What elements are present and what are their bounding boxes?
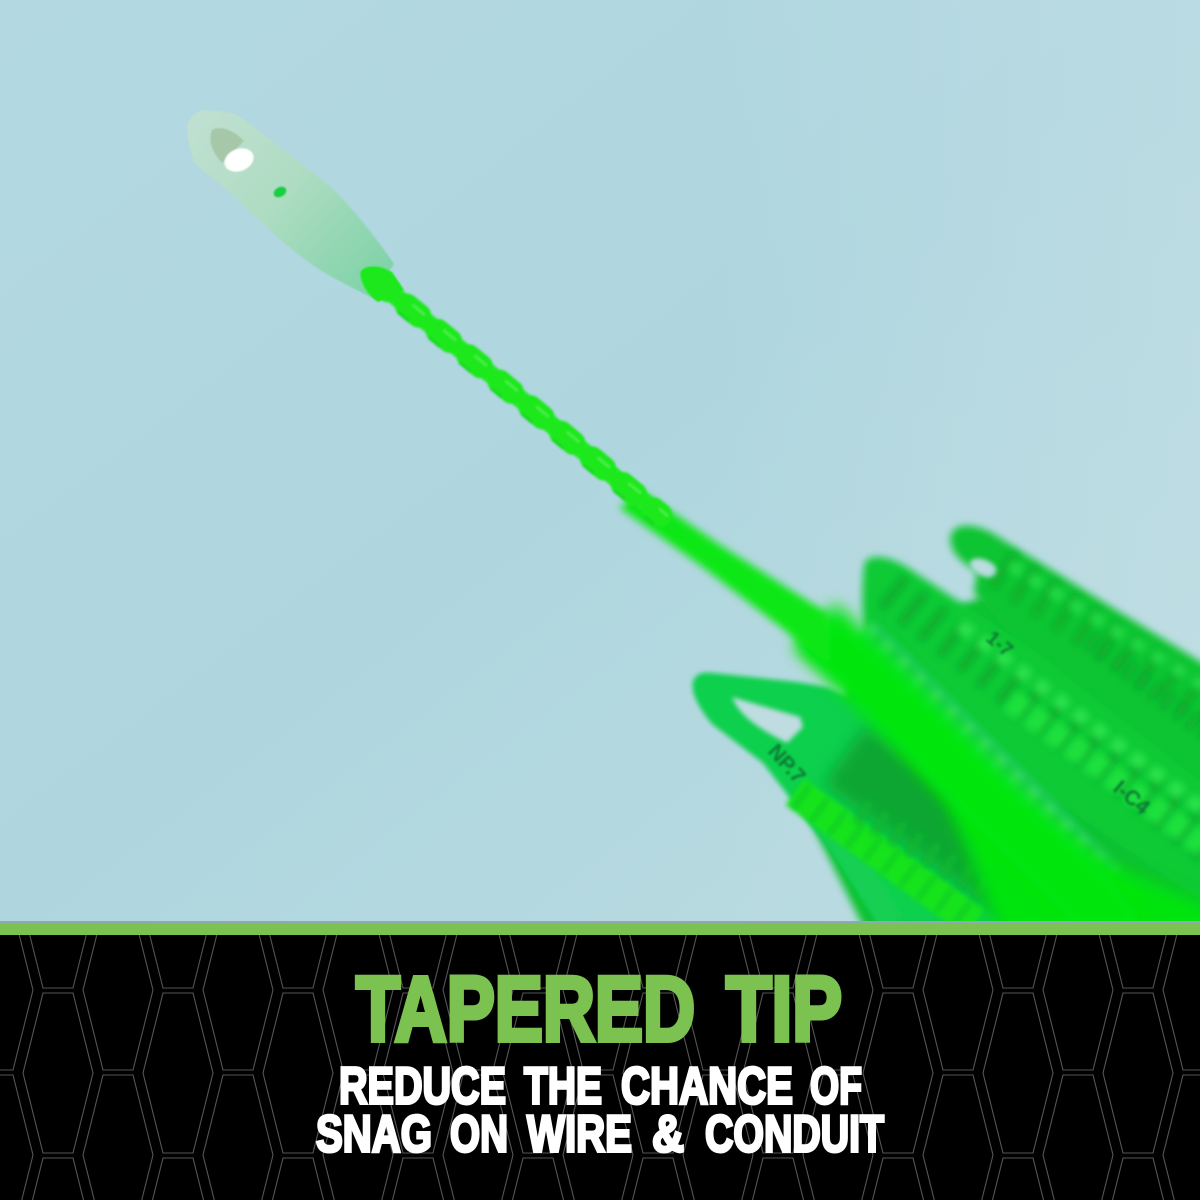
subtitle line 1: THE <box>524 1056 602 1114</box>
subtitle line 1: OF <box>810 1056 862 1114</box>
strand: lower-left loop <box>689 669 995 921</box>
subtitle line 1: CHANCE <box>621 1056 793 1114</box>
subtitle line 2: ON <box>450 1104 508 1162</box>
green divider bar <box>0 923 1200 935</box>
subtitle line 2: & <box>652 1104 684 1162</box>
subtitle <box>316 1056 884 1162</box>
marking text on strands: 1-7 <box>982 628 1016 661</box>
strand: far right loop <box>944 520 1200 735</box>
subtitle line 1: REDUCE <box>339 1056 506 1114</box>
strand: pale middle twist <box>862 632 1110 880</box>
photo: green fish tape bundle <box>693 526 1200 960</box>
marking text on strands: NP.7 <box>763 740 810 788</box>
cord: blurred central strand <box>786 632 1200 921</box>
bar shadow <box>0 921 1200 923</box>
subtitle line 2: WIRE <box>527 1104 632 1162</box>
photo background <box>0 0 1200 923</box>
strand: middle loop <box>862 557 1200 920</box>
subtitle line 1 <box>339 1056 862 1114</box>
title: TIP <box>726 958 842 1060</box>
subtitle line 2: SNAG <box>316 1104 432 1162</box>
subtitle line 2 <box>316 1104 884 1162</box>
bundle base <box>803 594 1200 921</box>
hexagon pattern <box>0 935 1200 1200</box>
black text band <box>0 935 1200 1200</box>
marking text on strands: I-C4 <box>1109 776 1154 820</box>
subtitle line 2: CONDUIT <box>705 1104 884 1162</box>
title: TAPERED <box>356 958 695 1060</box>
cord: twisted line <box>366 275 830 665</box>
icon: tapered tip eyelet <box>187 110 404 302</box>
marking text on strands <box>763 628 1154 820</box>
